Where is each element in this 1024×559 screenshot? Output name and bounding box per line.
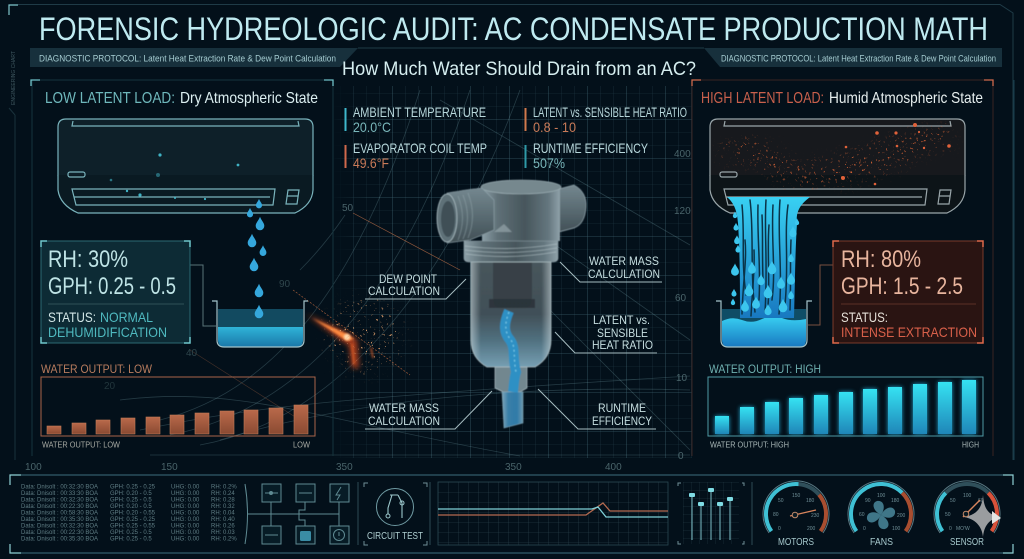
bar chart: water output high: WATER OUTPUT: HIGH [710, 440, 789, 450]
water drops: sparse [247, 199, 266, 318]
callout: latent vs sensible heat ratio: HEAT RATIO [592, 338, 653, 352]
status box: high: INTENSE EXTRACTION [841, 324, 977, 340]
gauge: motors: 0 [778, 526, 781, 532]
data log: UHG: 0.00 [171, 484, 200, 490]
inner tube [493, 262, 532, 308]
waveform monitor [438, 482, 668, 545]
data log: Data: Dnisolt : 00:35:30 BOA [21, 536, 98, 542]
gauge: motors: 50 [778, 498, 784, 504]
data log: RH: 0.2% [211, 484, 237, 490]
data log: GPH: 0.25 - 0.25 [110, 484, 156, 490]
callout: water mass calculation right: WATER MASS [589, 254, 659, 268]
callout: runtime efficiency: EFFICIENCY [592, 414, 652, 428]
chart axis numbers: 400 [605, 462, 622, 473]
circuit test button: CIRCUIT TEST [367, 531, 423, 542]
metric: ambient temperature [344, 104, 486, 135]
water bucket: low [212, 301, 308, 347]
data log: GPH: 0.25 - 0.55 [110, 524, 156, 530]
data log: UHG: 0.00 [171, 517, 200, 523]
data log [21, 484, 237, 542]
chart axis numbers: 50 [342, 203, 354, 214]
AC unit: humid [710, 119, 965, 213]
chart axis numbers: 10 [676, 373, 688, 384]
data log: GPH: 0.25 - 0.25 [110, 517, 156, 523]
chart axis numbers [25, 149, 691, 473]
gauge: motors: 200 [807, 526, 816, 532]
gauge: fans: 100 [877, 493, 886, 499]
data log: RH: 0.28 [211, 498, 235, 504]
chart axis numbers: 100 [25, 462, 42, 473]
circuit test button [358, 482, 430, 545]
data log: RH: 0.32 [211, 504, 235, 510]
chart axis numbers: 350 [336, 462, 353, 473]
right port [555, 185, 586, 233]
connector [808, 265, 833, 325]
status box: high [833, 241, 983, 343]
data log: GPH: 0.25 - 0.5 [110, 530, 152, 536]
bowl highlights [471, 262, 551, 367]
subtitle: How Much Water Should Drain from an AC? [342, 58, 696, 80]
bowl [471, 262, 551, 367]
callout: runtime efficiency: RUNTIME [598, 401, 646, 415]
gauge: fans: 60 [859, 512, 865, 518]
chart axis numbers: 350 [505, 462, 522, 473]
diagnostic protocol banner left [30, 48, 358, 67]
data log: Data: Dnisolt : 00:32:30 BOA [21, 524, 98, 530]
data log: Data: Dnisolt : 00:58:30 BOA [21, 510, 98, 516]
callout: water mass calculation left: WATER MASS [369, 401, 439, 415]
data log: RH: 0.24 [211, 491, 235, 497]
heading: high latent load: Humid Atmospheric State [829, 90, 983, 107]
bottom console frame [10, 475, 1013, 553]
gauge: sensor [934, 481, 1001, 548]
metric: runtime efficiency: 507% [533, 155, 565, 171]
collar [464, 241, 558, 262]
metric: latent vs sensible heat ratio [524, 104, 687, 135]
bar chart: water output low: WATER OUTPUT: LOW [42, 440, 120, 450]
status box: low: STATUS: [48, 309, 96, 325]
gauge: fans: 0 [863, 526, 866, 532]
data log: GPH: 0.20 - 0.55 [110, 510, 156, 516]
data log: UHG: 0.00 [171, 524, 200, 530]
panel: high latent load [692, 80, 993, 456]
gauge: sensor: 0 [949, 526, 952, 532]
heading: low latent load: Dry Atmospheric State [180, 90, 318, 107]
water bucket: high [716, 301, 812, 347]
data log: UHG: 0.00 [171, 536, 200, 542]
neck [495, 367, 527, 392]
gauge: fans: 100 [892, 526, 901, 532]
gauge: motors: 180 [806, 498, 815, 504]
gauge: fans: 200 [897, 513, 906, 519]
panel: low latent load [31, 80, 333, 456]
data log: Data: Dnisolt : 00:22:30 BOA [21, 530, 98, 536]
data log: GPH: 0.25 - 0.5 [110, 536, 152, 542]
waterfall: heavy condensate [727, 197, 810, 318]
sparkle marker [964, 495, 1000, 537]
outer frame: ENGINEERING CHART [11, 50, 17, 105]
outlet tube [502, 392, 523, 428]
diagnostic protocol banner left: DIAGNOSTIC PROTOCOL: Latent Heat Extraction Rate & Dew Point Calculation [39, 54, 336, 64]
data log: RH: 0.40 [211, 517, 235, 523]
data log: Data: Dnisolt : 00:32:30 BOA [21, 484, 98, 490]
bar chart: water output low [41, 362, 315, 450]
callout: latent vs sensible heat ratio [555, 313, 657, 353]
chart axis numbers: 60 [675, 293, 687, 304]
data log: UHG: 0.00 [171, 510, 200, 516]
gauge: motors [763, 481, 829, 548]
heading: high latent load: HIGH LATENT LOAD: [701, 90, 824, 107]
data log: UHG: 0.00 [171, 504, 200, 510]
orange dew point spark [306, 289, 412, 383]
gauge: motors: 230 [811, 513, 820, 519]
data log: GPH: 0.20 - 0.5 [110, 491, 152, 497]
chart axis numbers: 90 [279, 279, 291, 290]
metric readouts [344, 104, 687, 171]
bar chart: water output high: HIGH [962, 440, 979, 450]
data log: RH: 0.2% [211, 536, 237, 542]
gauge: sensor: 100 [963, 493, 972, 499]
chart axis numbers: 400 [674, 149, 691, 160]
heading: high latent load [701, 90, 983, 107]
gauge: fans: 90 [865, 498, 871, 504]
cap [482, 186, 560, 241]
status box: low: RH: 30% [48, 246, 128, 273]
data log: UHG: 0.00 [171, 491, 200, 497]
data log: Data: Dnisolt : 00:22:30 BOA [21, 504, 98, 510]
callout: water mass calculation right: CALCULATION [588, 267, 660, 281]
metric: latent vs sensible heat ratio: LATENT vs. SENSIBLE HEAT RATIO [533, 104, 687, 120]
status box: low: DEHUMIDIFICATION [48, 324, 167, 340]
metric: latent vs sensible heat ratio: 0.8 - 10 [533, 119, 576, 135]
data log: Data: Dnisolt : 00:32:30 BOA [21, 498, 98, 504]
status box: low: GPH: 0.25 - 0.5 [48, 273, 176, 300]
data log: Data: Dnisolt : 00:33:30 BOA [21, 491, 98, 497]
connector [190, 265, 216, 326]
gauge: sensor: SENSOR [950, 536, 984, 548]
gauge: fans: 180 [891, 498, 900, 504]
metric: evaporator coil temp: EVAPORATOR COIL TEMP [353, 140, 487, 156]
metric: ambient temperature: 20.0°C [353, 119, 391, 135]
chart axis numbers: 40 [186, 348, 198, 359]
bar chart: water output low: LOW [293, 440, 310, 450]
chart axis numbers: 120 [674, 206, 691, 217]
metric: runtime efficiency [524, 140, 649, 171]
gauge: motors: 80 [773, 512, 779, 518]
heading: low latent load [45, 90, 318, 107]
callout: water mass calculation left [365, 391, 492, 429]
gauge: sensor: 50 [945, 512, 951, 518]
data log: Data: Dnisolt : 00:35:30 BOA [21, 517, 98, 523]
gauge: fans [848, 481, 914, 548]
data log: RH: 0.04 [211, 510, 235, 516]
icon: fan [867, 501, 895, 529]
data log: GPH: 0.25 - 0.5 [110, 498, 152, 504]
gauge: sensor: MO'W [956, 526, 970, 532]
chart axis numbers: 150 [161, 462, 178, 473]
metric: evaporator coil temp [344, 140, 487, 171]
chart axis numbers: 20 [104, 381, 116, 392]
bar chart: water output high: WATER OUTPUT: HIGH [709, 362, 821, 376]
callout: dew point calculation: DEW POINT [379, 272, 438, 286]
callout: dew point calculation: CALCULATION [368, 284, 440, 298]
clear filter housing [437, 180, 586, 428]
water swirl [505, 311, 516, 392]
status box: high: STATUS: [841, 309, 888, 325]
callout: dew point calculation [365, 272, 466, 299]
AC unit: dry [58, 119, 313, 213]
status box: high: GPH: 1.5 - 2.5 [841, 273, 963, 300]
gauge: sensor: 60 [978, 498, 984, 504]
gauge: fans: FANS [870, 536, 893, 548]
gauge: sensor: 50 [950, 498, 956, 504]
outer frame [9, 4, 1014, 460]
psychrometric chart background [120, 86, 692, 458]
left port [447, 188, 494, 243]
callout: latent vs sensible heat ratio: LATENT vs. [593, 313, 650, 327]
metric: evaporator coil temp: 49.6°F [353, 155, 389, 171]
callout: latent vs sensible heat ratio: SENSIBLE [597, 326, 648, 340]
data log: UHG: 0.00 [171, 498, 200, 504]
callout: water mass calculation right [560, 254, 662, 282]
callout: water mass calculation left: CALCULATION [368, 414, 440, 428]
bar chart: water output low: WATER OUTPUT: LOW [41, 362, 153, 376]
callout: runtime efficiency [538, 389, 656, 429]
diagnostic protocol banner right [358, 48, 1002, 67]
data log: GPH: 0.20 - 0.5 [110, 504, 152, 510]
chart axis numbers: 0 [678, 451, 684, 462]
data log: RH: 0.03 [211, 530, 235, 536]
slider bank [678, 482, 752, 545]
gauge: motors: 150 [792, 493, 801, 499]
status box: low [41, 241, 190, 343]
metric: runtime efficiency: RUNTIME EFFICIENCY [533, 140, 649, 156]
circuit schematic [245, 484, 349, 544]
metric: ambient temperature: AMBIENT TEMPERATURE [353, 104, 486, 120]
data log: RH: 0.26 [211, 524, 235, 530]
heading: low latent load: LOW LATENT LOAD: [45, 90, 175, 107]
status box: low: NORMAL [100, 309, 153, 325]
data log: UHG: 0.00 [171, 530, 200, 536]
gauge: motors: MOTORS [778, 536, 814, 548]
status box: high: RH: 80% [841, 246, 921, 273]
bar chart: water output high [708, 362, 983, 450]
